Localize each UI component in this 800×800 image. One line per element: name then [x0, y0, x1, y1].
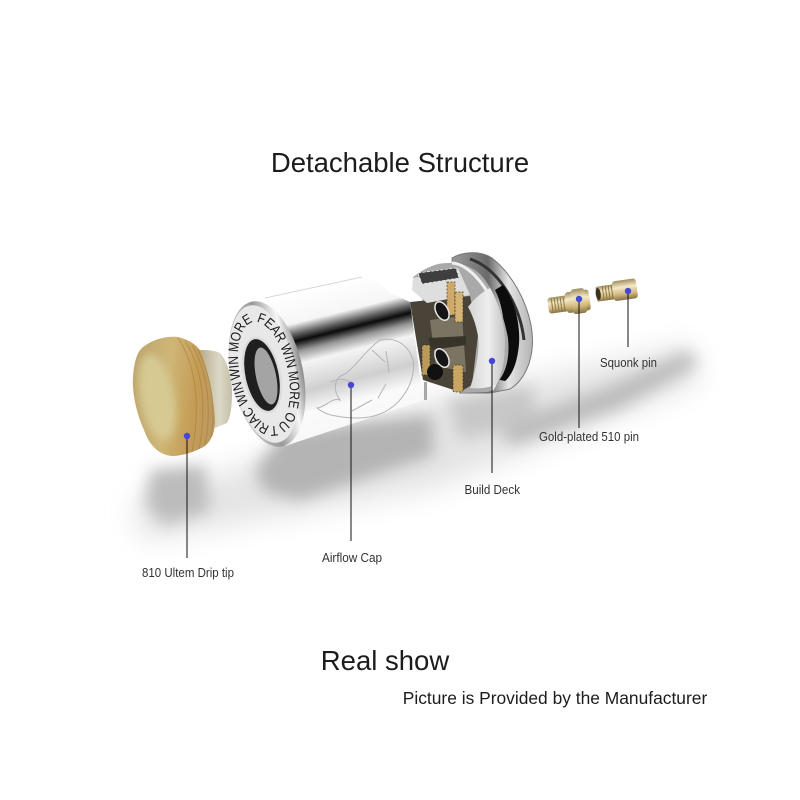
part: airflow cap body [228, 276, 420, 447]
product: atomizer parts [132, 252, 638, 456]
part: squonk pin [594, 278, 638, 304]
callout: 810 Ultem Drip tip [142, 433, 234, 580]
callout: Airflow Cap: Airflow Cap [322, 550, 382, 565]
part: build deck [410, 253, 532, 400]
callout: 810 Ultem Drip tip: 810 Ultem Drip tip [142, 565, 234, 580]
callout: Squonk pin: Squonk pin [600, 355, 657, 370]
part: gold-plated 510 pin [546, 287, 591, 318]
engraved lion logo [317, 339, 413, 418]
outer flange [452, 253, 532, 393]
callout: Build Deck [464, 358, 520, 497]
title: Detachable Structure: Detachable Structure [271, 147, 529, 178]
silver ring [413, 263, 509, 393]
callout: Airflow Cap [322, 382, 382, 565]
deck wall [468, 288, 505, 388]
part: 810 Ultem drip tip [132, 337, 232, 456]
callout: Squonk pin [600, 288, 657, 370]
callout: Gold-plated 510 pin [539, 296, 639, 444]
top plate [412, 268, 470, 303]
engraved ring text: WIN MORE FEAR WIN MORE OUTRIAC WIN [228, 312, 300, 436]
caption: manufacturer note: Picture is Provided by the Manufacturer [403, 688, 707, 708]
drop shadows under the product [130, 345, 700, 540]
cavity [410, 296, 478, 392]
heading: Real show: Real show [321, 645, 449, 676]
callout: Gold-plated 510 pin: Gold-plated 510 pin [539, 429, 639, 444]
coils and deck posts [422, 282, 463, 400]
callout: Build Deck: Build Deck [464, 482, 520, 497]
